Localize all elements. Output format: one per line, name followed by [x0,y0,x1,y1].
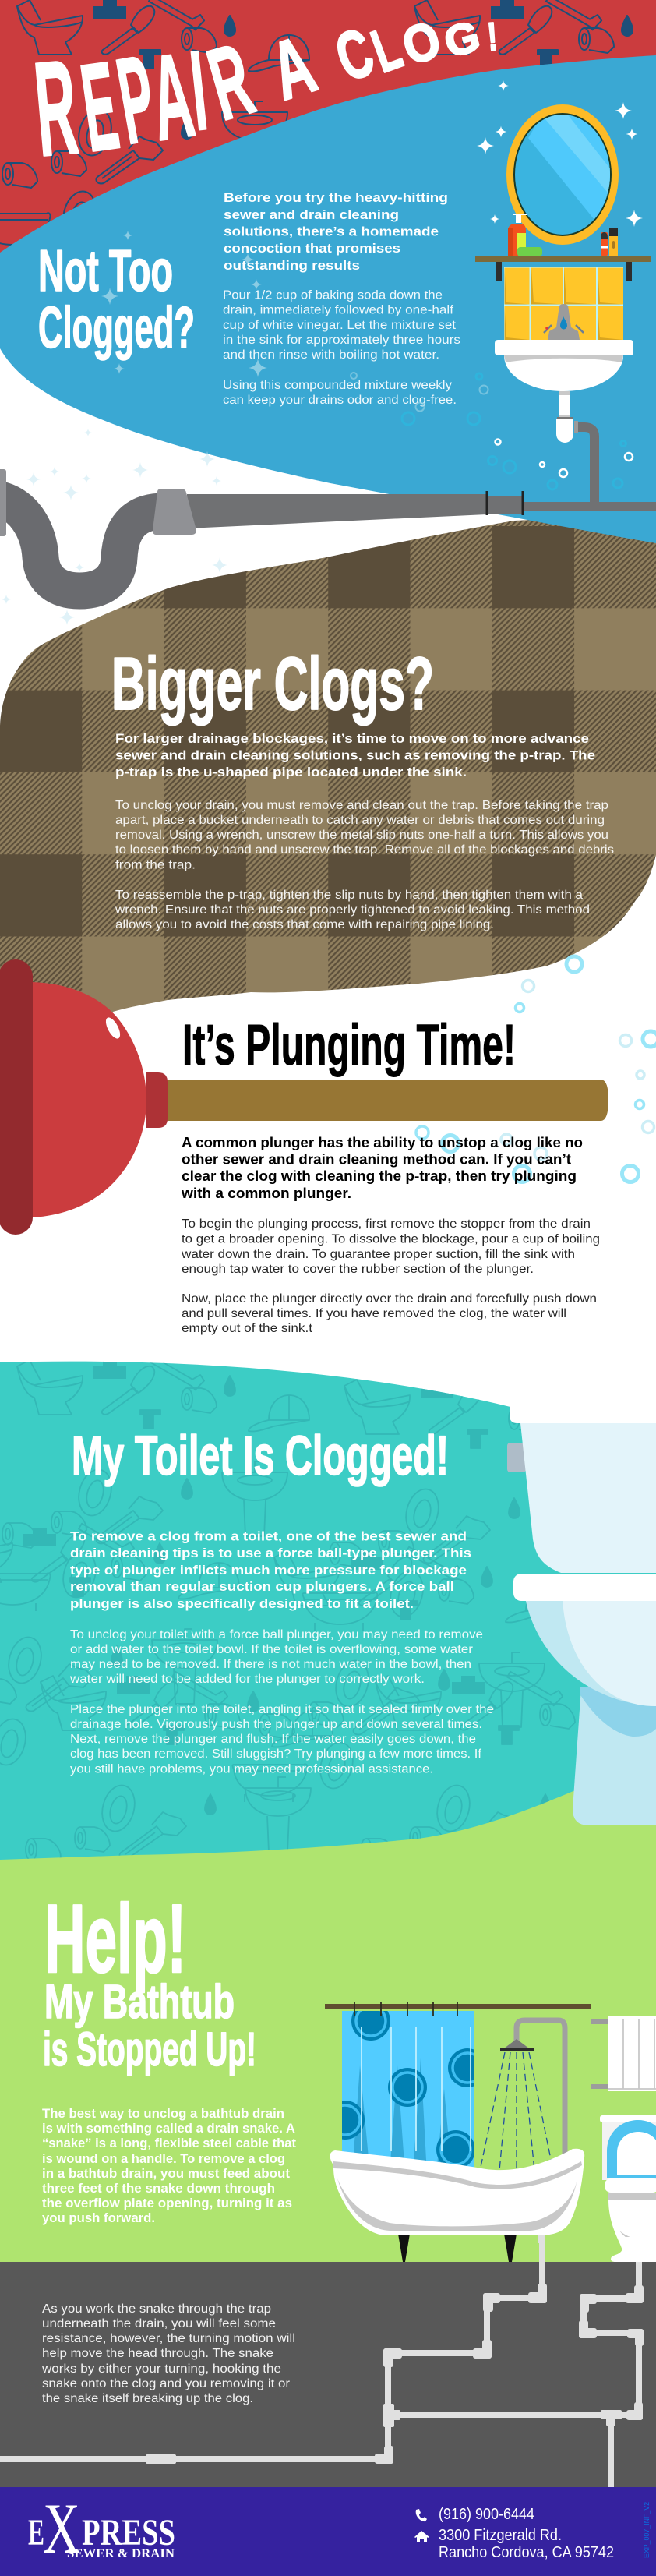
icon: yellow tiles [504,267,623,340]
text block: drain snake: in a bathtub drain, you must feed about [42,2166,290,2181]
logo: Express Sewer & Drain [28,2489,175,2568]
sparkles: faint in blue and white areas [2,231,267,625]
icon: shower head and water [480,2020,565,2171]
text block: force ball plunger: drainage hole. Vigorously push the plunger up and down several times. [70,1718,482,1731]
text block: working the snake: resistance, however, the turning motion will [42,2332,295,2345]
panel: blue section [0,55,656,543]
icon: white plumbing pipes [0,2237,644,2487]
text block: common plunger: enough tap water to cover the rubber section of the plunger. [182,1263,534,1276]
text block: p-trap: For larger drainage blockages, it’s time to move on to more advance [115,731,589,746]
text block: common plunger: other sewer and drain cleaning method can. If you can’t [182,1152,571,1168]
contact text: (916) 900-6444 [439,2506,534,2523]
text block: common plunger: To begin the plunging process, first remove the stopper from the drain [182,1217,591,1231]
logo: Express Sewer & Drain: PRESS [82,2512,175,2553]
icon: side toilet [600,2115,656,2262]
document code: EXP_007_INF_V2 [643,2502,651,2558]
text block: p-trap: apart, place a bucket underneath to catch any water or debris that comes out during [115,814,605,827]
text block: common plunger: empty out of the sink.t [182,1322,313,1335]
text block: p-trap: removal. Using a wrench, unscrew the metal slip nuts one-half a turn. This allows you [115,829,608,842]
heading: Help! My Bathtub is Stopped Up! [43,1885,256,2076]
sparkles: around mirror [477,80,643,227]
text block: drain snake: “snake” is a long, flexible steel cable that [42,2136,296,2150]
title: I [185,27,212,154]
text block: working the snake: snake onto the clog and you removing it or [42,2377,290,2390]
text block: force ball plunger: you still have problems, you may need professional assistance. [70,1763,433,1776]
text block: force ball plunger: plunger is also specifically designed to fit a toilet. [70,1596,414,1611]
icon: radiator [591,2016,656,2091]
text block: p-trap: allows you to avoid the costs that come with repairing pipe lining. [115,918,494,931]
text block: force ball plunger: may need to be removed. If there is not much water in the bowl, then [70,1658,471,1671]
text block: force ball plunger: To remove a clog from a toilet, one of the best sewer and [70,1529,467,1543]
text block: force ball plunger [69,1529,494,1776]
text block: drain snake: is wound on a handle. To remove a clog [42,2151,285,2166]
title: A [260,19,326,118]
text block: baking soda [223,190,460,407]
heading: Help! My Bathtub is Stopped Up!: Help! [44,1885,186,1993]
text block: baking soda: in the sink for approximately three hours [223,334,460,347]
text block: force ball plunger: type of plunger inflicts much more pressure for blockage [70,1563,467,1578]
text block: baking soda: can keep your drains odor and clog-free. [223,394,457,407]
heading: Not Too Clogged?: Not Too [38,238,173,303]
text block: common plunger: and pull several times. If you have removed the clog, the water will [182,1307,566,1320]
text block: drain snake: you push forward. [42,2210,155,2225]
text block: drain snake: three feet of the snake down through [42,2181,275,2196]
text block: force ball plunger: clog has been removed. Still sluggish? Try plunging a few more times. If [70,1747,482,1761]
title: C [326,14,383,96]
text block: p-trap: sewer and drain cleaning solutions, such as removing the p-trap. The [115,748,595,762]
icon: bathtub [330,2149,584,2262]
text block: drain snake: is with something called a drain snake. A [42,2121,295,2136]
text block: baking soda: solutions, there’s a homemade [224,224,439,239]
title [30,10,499,185]
text block: force ball plunger: water will need to be added for the plunger to correctly work. [69,1673,425,1686]
text block: common plunger: to get a broader opening. To dissolve the blockage, pour a cup of boiling [182,1233,600,1246]
panel: footer [0,2487,656,2576]
icon: house [414,2531,429,2542]
icon: toilet [507,1356,656,1825]
title: E [74,35,125,178]
icon: shelf [475,256,651,281]
text block: working the snake [41,2302,295,2405]
text block: force ball plunger: Next, remove the plunger and flush. If the water easily goes down, the [70,1733,476,1746]
heading: Not Too Clogged?: Clogged? [38,295,195,360]
text block: baking soda: cup of white vinegar. Let the mixture set [223,319,457,332]
panel: teal section with doodles [0,1361,656,1860]
title: P [108,30,164,170]
icon: faucet [544,304,584,340]
text block: baking soda: outstanding results [224,258,360,273]
text block: common plunger: with a common plunger. [181,1186,351,1201]
logo: Express Sewer & Drain: X [43,2489,80,2568]
text block: drain snake: the overflow plate opening, turning it as [42,2196,292,2210]
text block: working the snake: help move the head through. The snake [42,2347,273,2360]
text block: drain snake [42,2106,296,2225]
text block: working the snake: works by either your turning, hooking the [41,2362,281,2376]
text block: working the snake: underneath the drain, you will feel some [42,2317,276,2330]
panel: red header with plumbing doodles [0,0,656,261]
text block: force ball plunger: or add water to the toilet bowl. If the toilet is overflowing, some water [70,1643,473,1656]
title: ! [486,14,499,59]
text block: p-trap: p-trap is the u-shaped pipe located under the sink. [115,765,467,779]
text block: baking soda: Pour 1/2 cup of baking soda down the [223,288,443,302]
text block: baking soda: Before you try the heavy-hitting [224,190,448,205]
title: R [197,21,264,142]
title: R [30,32,83,185]
text block: baking soda: drain, immediately followed by one-half [223,304,454,316]
title: G [439,11,485,67]
title: A [143,27,201,166]
heading: Help! My Bathtub is Stopped Up!: My Bathtub [44,1975,235,2028]
heading: Help! My Bathtub is Stopped Up!: is Stopped Up! [43,2023,256,2076]
text block: common plunger: clear the clog with cleaning the p-trap, then try plunging [182,1168,577,1184]
text block: baking soda: Using this compounded mixture weekly [223,379,452,392]
logo: Express Sewer & Drain: E [28,2512,44,2553]
text block: p-trap [115,731,614,931]
icon: shower curtain and rod [325,2002,591,2175]
title: L [363,12,410,86]
text block: working the snake: the snake itself breaking up the clog. [42,2392,253,2405]
text block: p-trap: from the trap. [115,859,196,871]
text block: force ball plunger: drain cleaning tips is to use a force ball-type plunger. This [70,1546,471,1560]
text block: common plunger [181,1135,600,1335]
text block: force ball plunger: Place the plunger into the toilet, angling it so that it sealed firmly over the [70,1703,494,1716]
logo: Express Sewer & Drain: SEWER & DRAIN [67,2547,175,2560]
text block: common plunger: water down the drain. To guarantee proper suction, fill the sink with [181,1248,575,1261]
text block: force ball plunger: removal than regular suction cup plungers. A force ball [70,1579,454,1594]
text block: p-trap: To unclog your drain, you must remove and clean out the trap. Before taking the trap [115,799,608,812]
icon: phone [416,2509,427,2521]
icon: sink basin [495,340,633,443]
icon: p-trap pipe [0,469,196,591]
heading: Bigger Clogs?: Bigger Clogs? [111,642,434,726]
text block: common plunger: A common plunger has the ability to unstop a clog like no [182,1135,583,1150]
icon: soap and bottles on shelf [508,214,618,256]
panel: green section [0,1781,656,2262]
title: O [396,10,448,76]
text block: p-trap: To reassemble the p-trap, tighten the slip nuts by hand, then tighten them with a [115,889,583,902]
text block: force ball plunger: To unclog your toilet with a force ball plunger, you may need to remove [70,1628,483,1641]
icon: plunger [0,959,608,1235]
text block: baking soda: and then rinse with boiling hot water. [223,348,439,362]
contact text: 3300 Fitzgerald Rd. [439,2527,562,2544]
text block: p-trap: wrench. Ensure that the nuts are properly tightened to avoid leaking. This method [115,903,590,917]
panel: brown plaid section [0,514,656,1037]
heading: Not Too Clogged? [38,238,195,360]
text block: common plunger: Now, place the plunger directly over the drain and forcefully push down [182,1292,597,1306]
contact text [439,2506,614,2561]
panel: dark gray section [0,2262,656,2487]
text block: baking soda: concoction that promises [224,241,400,256]
heading: My Toilet Is Clogged!: My Toilet Is Clogged! [72,1426,449,1487]
contact text: Rancho Cordova, CA 95742 [439,2544,614,2561]
text block: drain snake: The best way to unclog a bathtub drain [42,2106,284,2121]
bubbles: blue section [351,373,633,489]
icon: mirror [506,104,623,245]
text block: baking soda: sewer and drain cleaning [224,207,399,222]
text block: p-trap: to loosen them by hand and unscrew the trap. Remove all of the blockages and debris [115,843,614,857]
text block: working the snake: As you work the snake through the trap [42,2302,271,2316]
icon: drain pipes [187,421,656,528]
bubbles: plunger section [416,956,656,1182]
